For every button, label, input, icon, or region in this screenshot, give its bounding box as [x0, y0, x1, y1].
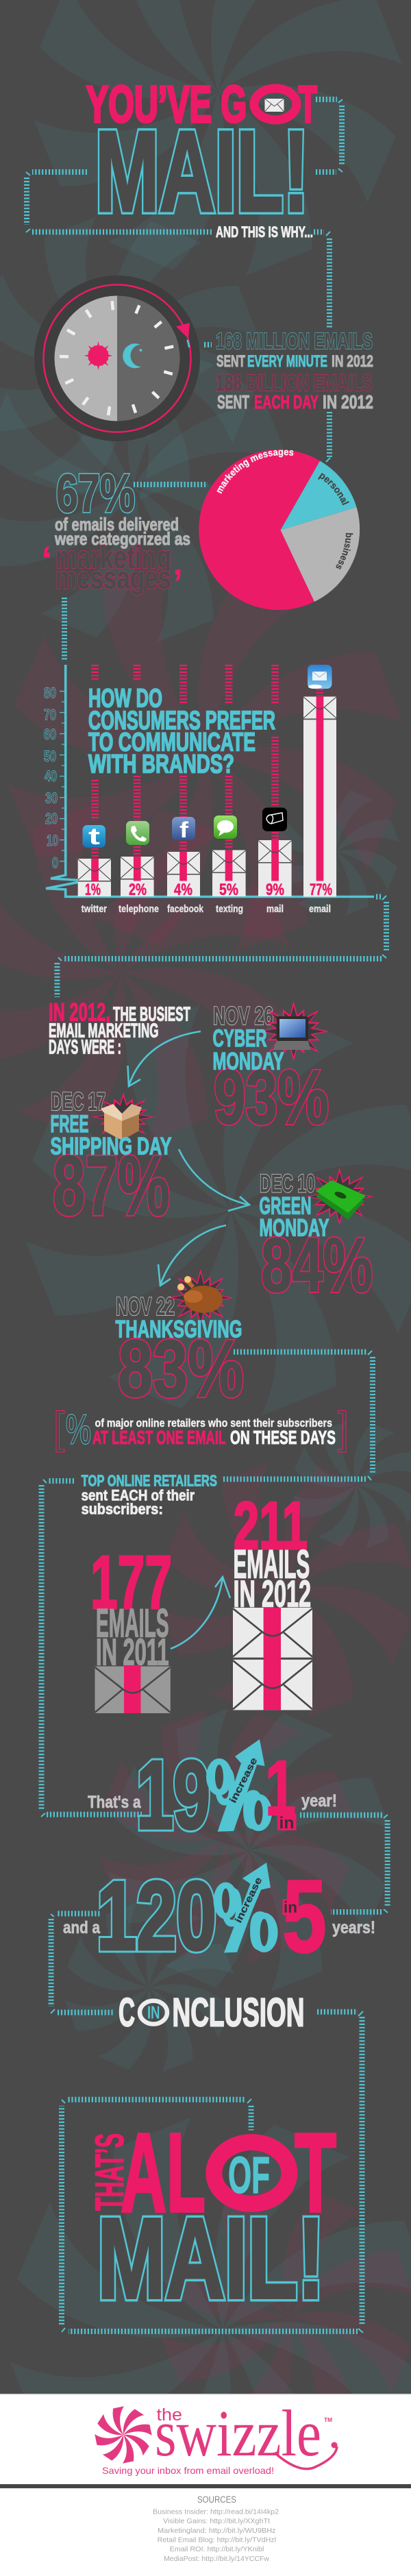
tagline: Saving your inbox from email overload! [102, 2465, 274, 2476]
stat: 19 percent increase in 1 year: 19 [136, 1741, 210, 1849]
stat: 188 billion emails: IN 2012 [323, 391, 373, 413]
connector: chart to busiest days [57, 896, 386, 997]
stat: 120 percent increase in 5 years: and a [63, 1918, 101, 1937]
stat: 120 percent increase in 5 years: years! [332, 1918, 375, 1937]
stat: 19 percent increase in 1 year: 1 [265, 1745, 296, 1832]
closing: that's a lot of [88, 2110, 336, 2235]
bar labels: twitter [82, 903, 107, 915]
arrow: to free shipping day [127, 1031, 201, 1086]
axis labels: 60 [44, 726, 56, 743]
stat: 67 percent [41, 463, 208, 604]
axis labels: 0 [52, 854, 58, 872]
heading: top online retailers [82, 1472, 217, 1517]
bar: email: 77% [310, 881, 332, 899]
callout: percent of retailers: % [66, 1406, 91, 1453]
icon: turkey in burst [168, 1269, 234, 1327]
heading: in conclusion: C [119, 1990, 135, 2035]
icon: money in burst [306, 1168, 374, 1225]
icon: swizzle pinwheel [87, 2399, 160, 2471]
axis labels: 50 [44, 748, 56, 765]
callout: percent of retailers: AT LEAST ONE EMAIL [92, 1427, 226, 1448]
bar: mail: 9% [266, 881, 284, 899]
stat: 211 emails in 2012: EMAILS [233, 1542, 310, 1587]
heading: busiest email marketing days: EMAIL MARKETING [49, 1020, 159, 1042]
stat: 19 percent increase in 1 year: increase [227, 1756, 259, 1804]
icon: telephone [126, 821, 149, 845]
callout: percent of retailers: ON THESE DAYS [230, 1427, 336, 1448]
event: free shipping day: FREE [51, 1111, 89, 1138]
stat: 177 emails in 2011: IN 2011 [96, 1631, 169, 1673]
event: free shipping day [51, 1088, 171, 1234]
event: thanksgiving: 83% [118, 1324, 244, 1414]
event: thanksgiving: 83% [118, 1324, 244, 1414]
stat: 67 percent: 67% [56, 463, 135, 524]
event: free shipping day: DEC 17 [51, 1088, 105, 1116]
stat: 67 percent: messages [55, 560, 171, 596]
sources: Marketingland: http://bit.ly/WU9BHz [158, 2527, 276, 2535]
event: cyber monday: MONDAY [212, 1048, 284, 1075]
event: free shipping day: DEC 17 [51, 1088, 105, 1116]
heading: top online retailers: sent EACH of their [82, 1487, 195, 1504]
event: cyber monday: 93% [214, 1054, 329, 1140]
title: you've got: T [299, 75, 317, 133]
sources: Email ROI: http://bit.ly/YKnibl [170, 2545, 264, 2553]
event: free shipping day: 87% [53, 1139, 170, 1234]
axis labels [44, 684, 58, 872]
stat: 211 emails in 2012 [233, 1488, 312, 1710]
stat: 67 percent: marketing [55, 539, 171, 575]
event: cyber monday: CYBER [212, 1025, 267, 1052]
sources: Visible Gains: http://bit.ly/XXghTt [163, 2517, 270, 2525]
sources [0, 2488, 411, 2576]
sources: MediaPost: http://bit.ly/14YCCFw [164, 2555, 269, 2563]
event: free shipping day: SHIPPING DAY [51, 1133, 171, 1160]
stat: 120 percent increase in 5 years: 120 [97, 1861, 216, 1971]
bar chart: consumer preference [44, 665, 374, 915]
chart axis [46, 665, 374, 896]
heading: busiest email marketing days: DAYS WERE : [49, 1036, 121, 1058]
title: you've got: YOU’VE G [86, 75, 247, 133]
icon: box in burst [92, 1092, 155, 1142]
bar labels: facebook [167, 903, 204, 915]
stat: 188 billion emails: EACH DAY [254, 391, 319, 413]
pie chart [199, 450, 360, 610]
stat: 120 percent increase in 5 years: 5 [282, 1859, 326, 1974]
heading: busiest email marketing days [49, 998, 190, 1058]
bar labels: telephone [119, 903, 159, 915]
icon: texting [214, 815, 237, 839]
connector: thanksgiving to retailers [41, 1351, 373, 1817]
icon: grey envelope [95, 1665, 171, 1713]
stat: 168 million emails: EVERY MINUTE [247, 352, 327, 371]
stat: 67 percent: messages [55, 560, 171, 596]
stat: 177 emails in 2011: 177 [90, 1541, 172, 1625]
arrow: to thanksgiving [158, 1225, 226, 1286]
icon: facebook [172, 817, 195, 842]
closing: mail outlined: MAIL! [97, 2195, 325, 2322]
axis labels: 20 [45, 810, 58, 827]
icon: laptop in burst [258, 1001, 329, 1062]
bar: facebook [167, 852, 200, 899]
chart heading: CONSUMERS PREFER [88, 707, 275, 735]
title: mail outlined: MAIL! [95, 108, 309, 236]
stat: 19 percent increase in 1 year: year! [301, 1791, 337, 1811]
stat: 168 million emails [204, 328, 373, 371]
event: green monday: DEC 10 [260, 1169, 315, 1198]
arrow: 2011 to 2012 [171, 1577, 230, 1649]
in box: in [284, 1898, 297, 1916]
heading: in conclusion [119, 1990, 304, 2035]
stat: 19 percent increase in 1 year: That's a [88, 1793, 141, 1812]
event: green monday: 84% [261, 1223, 373, 1308]
stat: 188 billion emails [216, 370, 373, 413]
closing: mail outlined: MAIL! [97, 2195, 325, 2322]
heading: in conclusion: NCLUSION [173, 1990, 304, 2035]
stat: 120 percent increase in 5 years: increase [232, 1875, 264, 1924]
closing: that's a lot of: OF [228, 2146, 270, 2204]
pink dashed columns [95, 665, 320, 859]
event: green monday: DEC 10 [260, 1169, 315, 1198]
stat: 67 percent: ‘ [41, 538, 53, 581]
stat: 19 percent increase in 1 year [88, 1739, 337, 1849]
event: thanksgiving [115, 1269, 244, 1414]
bar labels [82, 903, 331, 915]
event: cyber monday: 93% [214, 1054, 329, 1140]
bar labels: mail [266, 903, 284, 915]
chart heading: WITH BRANDS? [88, 750, 234, 778]
sources: SOURCES [197, 2494, 236, 2505]
heading: top online retailers: subscribers: [82, 1501, 163, 1517]
event: green monday: MONDAY [259, 1214, 329, 1242]
title: mail outlined: MAIL! [95, 108, 309, 236]
closing: that's a lot of: AL [121, 2110, 206, 2235]
heading: busiest email marketing days: THE BUSIEST [113, 1003, 190, 1025]
sources: Business Insider: http://read.bi/14I4kp2 [153, 2508, 279, 2516]
logo wordmark: the [156, 2405, 182, 2425]
bar labels: texting [216, 903, 243, 915]
bar: telephone: 2% [129, 881, 147, 899]
chart heading: TO COMMUNICATE [88, 728, 256, 757]
stat: 188 billion emails: SENT [217, 391, 249, 413]
bar: texting: 5% [219, 881, 238, 899]
axis labels: 40 [45, 768, 57, 785]
stat: 67 percent: 67% [56, 463, 135, 524]
sources: Retail Email Blog: http://bit.ly/TVdHzl [158, 2536, 276, 2544]
stat: 19 percent increase in 1 year: 19 [136, 1741, 210, 1849]
stat: 19 percent increase in 1 year: % [214, 1747, 264, 1848]
heading: in conclusion: IN [147, 2002, 160, 2023]
event: thanksgiving: NOV 22 [116, 1292, 175, 1321]
stat: 67 percent: ’ [173, 561, 183, 604]
stat: 177 emails in 2011: EMAILS [96, 1601, 169, 1646]
icon: mailbox [262, 807, 287, 831]
bar: twitter: 1% [85, 881, 101, 899]
pie chart: personal [318, 473, 349, 506]
icon: envelope in the O [264, 99, 284, 112]
percent rings and arrow [206, 1739, 272, 1832]
event: green monday: GREEN [259, 1192, 311, 1220]
event: thanksgiving: NOV 22 [116, 1292, 175, 1321]
stat: 120 percent increase in 5 years: % [221, 1869, 271, 1969]
stat: 67 percent: of emails delivered [55, 514, 179, 535]
bar: twitter [78, 859, 111, 899]
stat: 177 emails in 2011 [90, 1541, 172, 1713]
heading: top online retailers: TOP ONLINE RETAILERS [82, 1472, 217, 1490]
event: cyber monday: NOV 26 [213, 1002, 273, 1030]
logo wordmark: TM [324, 2417, 332, 2423]
icon: twitter: t [88, 824, 100, 850]
bar: email [303, 696, 336, 899]
connector: conclusion frame [62, 2011, 363, 2333]
stat: 168 million emails: SENT [216, 352, 245, 371]
event: cyber monday: NOV 26 [213, 1002, 273, 1030]
stat: 168 million emails: IN 2012 [332, 352, 373, 371]
axis labels: 30 [45, 789, 58, 807]
icon: twitter [82, 824, 105, 850]
connector: into bar chart [62, 598, 67, 661]
axis labels: 70 [44, 706, 56, 724]
stat: 120 percent increase in 5 years: 120 [97, 1861, 216, 1971]
chart heading: HOW DO [88, 684, 162, 713]
bar: facebook: 4% [174, 881, 192, 899]
title: mail outlined [95, 108, 309, 236]
stat: 211 emails in 2012: 211 [234, 1488, 308, 1563]
chart heading [88, 684, 275, 778]
callout: percent of retailers: of major online retailers who sent their subscribers [95, 1416, 332, 1430]
connector: stats to pie [326, 412, 330, 462]
footer band: logo [0, 2394, 411, 2488]
subtitle: and this is why: AND THIS IS WHY... [216, 223, 313, 241]
bar: telephone [121, 857, 154, 899]
event: thanksgiving: THANKSGIVING [115, 1316, 242, 1343]
axis labels: 10 [47, 832, 58, 849]
icon: moon [123, 343, 142, 368]
callout: percent of retailers [56, 1406, 346, 1453]
connector: year to 5 years [51, 1815, 388, 2013]
event: green monday: 84% [261, 1223, 373, 1308]
pie chart: business [336, 533, 353, 569]
icon: sun [84, 341, 112, 370]
event: free shipping day: 87% [53, 1139, 170, 1234]
icon: facebook: f [179, 818, 188, 842]
icon: white envelopes [233, 1608, 312, 1710]
clock arrow [176, 323, 190, 339]
arrow: to green monday [179, 1149, 249, 1211]
in box: in [279, 1814, 295, 1832]
event: green monday [259, 1168, 374, 1308]
clock graphic [34, 275, 200, 441]
connector: around title [26, 99, 342, 328]
bar labels: email [309, 903, 331, 915]
closing: that's a lot of: T [295, 2110, 336, 2235]
percent rings and arrow [214, 1863, 278, 1953]
logo wordmark: swizzle [155, 2396, 321, 2470]
closing: that's a lot of: THAT’S [88, 2133, 132, 2211]
axis labels: 80 [44, 684, 56, 702]
stat: 67 percent: marketing [55, 539, 171, 575]
bar: mail [258, 840, 292, 899]
stat: 211 emails in 2012: IN 2012 [233, 1572, 311, 1615]
stat: 120 percent increase in 5 years [63, 1859, 375, 1974]
pie chart: marketing messages [216, 450, 293, 493]
bar: texting [212, 850, 246, 899]
event: cyber monday [212, 1001, 329, 1140]
icon: email [308, 665, 332, 689]
stat: 67 percent: were categorized as [54, 528, 190, 549]
heading: busiest email marketing days: IN 2012, [49, 998, 110, 1027]
